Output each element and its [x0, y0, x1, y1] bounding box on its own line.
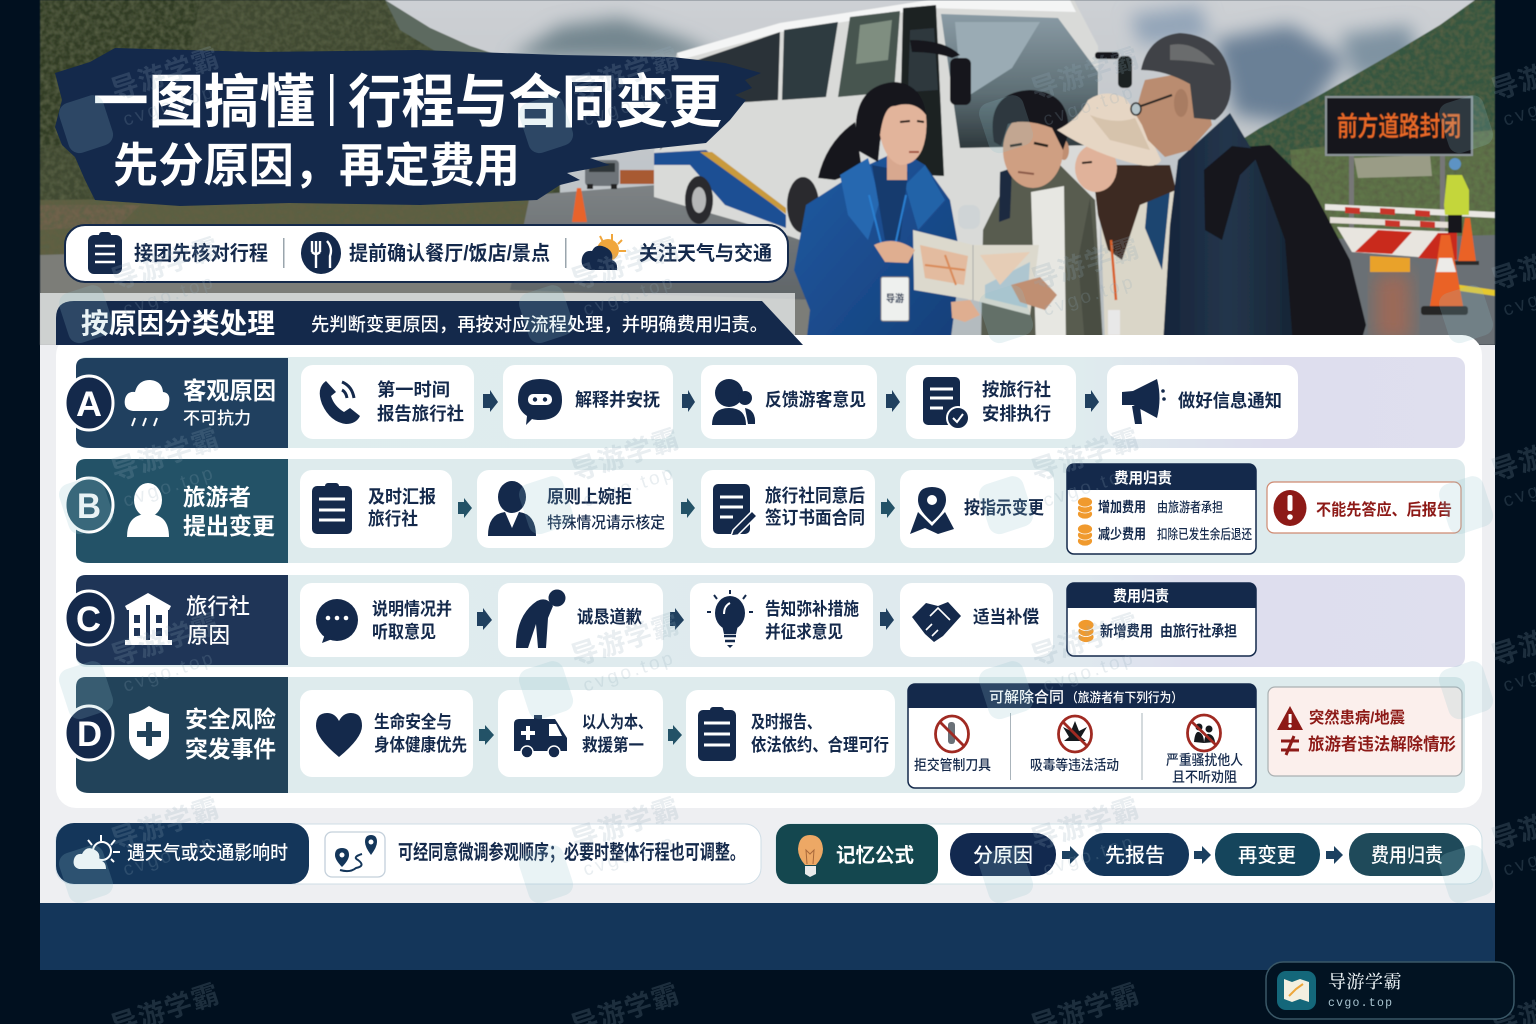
- arrow: [479, 725, 494, 745]
- step: explain and listen: [300, 583, 469, 657]
- icon: no harassment: [1188, 715, 1220, 751]
- bottom note: weather or traffic: 遇天气或交通影响时: [127, 842, 288, 864]
- diagonal watermarks: cvgo.top: [581, 462, 678, 512]
- label B: B: [77, 487, 101, 526]
- bottom note: weather or traffic: [56, 823, 761, 884]
- step: sign written contract: 旅行社同意后: [765, 485, 865, 506]
- step: decline in principle: [477, 470, 673, 548]
- cost responsibility box: [1067, 464, 1256, 554]
- cost responsibility box: 扣除已发生余后退还: [1157, 526, 1252, 542]
- label D: D: [77, 715, 102, 754]
- diagonal watermarks: 导游学霸: [1028, 793, 1143, 856]
- diagonal watermarks: 导游学霸: [108, 609, 223, 672]
- diagonal watermarks: 导游学霸: [568, 233, 683, 296]
- label A: 不可抗力: [183, 409, 251, 428]
- traffic barrier: [1325, 204, 1495, 272]
- step: explain and listen: 说明情况并: [372, 599, 452, 619]
- warning: don't agree first: 不能先答应、后报告: [1316, 500, 1452, 519]
- road worker in hi-vis vest: [1444, 158, 1469, 233]
- diagonal watermarks: cvgo.top: [121, 831, 218, 881]
- step pill: report: 先报告: [1105, 844, 1165, 867]
- diagonal watermarks: 导游学霸: [1028, 424, 1143, 487]
- cost responsibility box: 减少费用: [1098, 526, 1146, 542]
- step pill: change: 再变更: [1238, 844, 1296, 867]
- step: life first: [300, 690, 473, 777]
- diagonal watermarks: cvgo.top: [1041, 831, 1138, 881]
- step: life first: 生命安全与: [374, 712, 452, 732]
- step: notify: 做好信息通知: [1178, 390, 1282, 411]
- wet road with barrier area: [1280, 235, 1495, 345]
- diagonal watermarks: cvgo.top: [581, 831, 678, 881]
- step: change per instructions: [900, 470, 1054, 548]
- road closed LED sign: [1326, 97, 1472, 235]
- cost responsibility box: 由旅游者承担: [1157, 500, 1223, 515]
- folded map: [874, 230, 1057, 322]
- row C: agency causes: [65, 575, 1465, 667]
- tourist: young man: [981, 90, 1103, 345]
- tip: check itinerary: 接团先核对行程: [134, 241, 268, 265]
- label C: C: [76, 600, 101, 639]
- diagonal watermarks: 导游学霸: [1028, 233, 1143, 296]
- contract termination box: 吸毒等违法活动: [1030, 757, 1119, 773]
- step: report to agency: 第一时间: [377, 379, 450, 400]
- arrow: [1085, 390, 1099, 412]
- step pill: causes: [950, 833, 1056, 876]
- diagonal watermarks: cvgo.top: [1041, 81, 1138, 131]
- step: remedial measures: 告知弥补措施: [765, 599, 859, 619]
- arrow: [1326, 846, 1343, 864]
- arrow: [1194, 846, 1211, 864]
- diagonal watermarks: cvgo.top: [581, 647, 678, 697]
- brush stroke background: [55, 48, 761, 206]
- diagonal watermarks: cvgo.top: [121, 271, 218, 321]
- step: decline in principle: 原则上婉拒: [547, 486, 632, 507]
- arrow: [477, 608, 492, 630]
- step: compensate: 适当补偿: [973, 607, 1039, 627]
- step: explain and reassure: 解释并安抚: [575, 389, 660, 410]
- main white panel: [56, 335, 1482, 808]
- step: compensate: [900, 583, 1053, 657]
- icon: sun and cloud: [582, 234, 626, 270]
- diagonal watermarks: cvgo.top: [581, 271, 678, 321]
- bottom note: weather or traffic: 可经同意微调参观顺序；必要时整体行程也可调整。: [398, 840, 745, 864]
- step: life first: 身体健康优先: [374, 735, 467, 755]
- icon: route map: [325, 832, 385, 877]
- warning: illness or earthquake not a violation: 突然患病/地震: [1309, 708, 1405, 727]
- diagonal watermarks: 导游学霸: [1028, 609, 1143, 672]
- step: sincere apology: [498, 583, 663, 657]
- step: sign written contract: 签订书面合同: [765, 507, 865, 528]
- tips bar: [65, 225, 788, 282]
- icon: no weapons: [936, 716, 968, 752]
- diagonal watermarks: 导游学霸: [568, 424, 683, 487]
- step: follow agency: 安排执行: [982, 404, 1051, 424]
- icon: no drugs: [1058, 716, 1092, 752]
- label C: 原因: [187, 623, 230, 648]
- older man's backpack: [1204, 145, 1366, 345]
- contract termination box: 且不听劝阻: [1172, 769, 1237, 785]
- brand badge: 导游学霸: [1328, 968, 1402, 994]
- diagonal watermarks: 导游学霸: [108, 424, 223, 487]
- traffic cones: [1421, 218, 1479, 315]
- step: remedial measures: 并征求意见: [765, 622, 843, 642]
- step: report and act lawfully: [686, 690, 895, 777]
- step: report and act lawfully: 及时报告、: [751, 712, 821, 732]
- diagonal watermarks: 导游学霸: [568, 609, 683, 672]
- cost responsibility box: 费用归责: [1113, 587, 1169, 605]
- tip: watch weather: 关注天气与交通: [639, 241, 772, 265]
- title banner: 行程与合同变更: [348, 70, 722, 135]
- arrow: [458, 498, 472, 518]
- tour guide with lanyard and badge: 导游: [886, 292, 904, 305]
- cost responsibility box: 由旅行社承担: [1160, 622, 1237, 640]
- arrow: [681, 498, 695, 518]
- coach bus: [654, 0, 1132, 300]
- diagonal watermarks: cvgo.top: [581, 81, 678, 131]
- step: report to agency: [301, 365, 474, 439]
- tour guide with lanyard and badge: [794, 82, 961, 345]
- diagonal watermarks: 导游学霸: [568, 43, 683, 106]
- label D: [65, 677, 288, 793]
- warning: illness or earthquake not a violation: [1268, 687, 1462, 776]
- title banner: [55, 48, 761, 206]
- arrow: [682, 390, 695, 412]
- label B: [65, 459, 288, 563]
- step: sign written contract: [701, 470, 875, 548]
- contract termination box: 拒交管制刀具: [914, 757, 991, 773]
- light wash behind section: [40, 293, 795, 345]
- step pill: change: [1215, 833, 1320, 876]
- label D: 突发事件: [185, 736, 276, 762]
- row B: tourist requested change: [65, 459, 1465, 563]
- diagonal watermarks: cvgo.top: [1041, 462, 1138, 512]
- step: explain and listen: 听取意见: [372, 622, 436, 642]
- label D: 安全风险: [185, 706, 276, 732]
- diagonal watermarks: 导游学霸: [108, 43, 223, 106]
- icon: brand map: [1277, 971, 1316, 1010]
- label A: 客观原因: [183, 377, 276, 405]
- row A: objective causes: [65, 357, 1465, 448]
- label A: A: [76, 385, 102, 424]
- tourist: older man with glasses: [1131, 33, 1293, 345]
- diagonal watermarks: cvgo.top: [121, 81, 218, 131]
- contract termination box: （旅游者有下列行为）: [1066, 690, 1183, 705]
- diagonal watermarks: cvgo.top: [1041, 647, 1138, 697]
- arrow: [881, 498, 895, 518]
- step pill: report: [1083, 833, 1189, 876]
- step: report and act lawfully: 依法依约、合理可行: [751, 735, 889, 755]
- icon: fork and knife: [301, 232, 341, 274]
- hero photo: tour guide and tourists at closed mountain road: [40, 0, 1495, 345]
- diagonal watermarks: 导游学霸: [568, 793, 683, 856]
- step: report to agency: 报告旅行社: [377, 403, 464, 424]
- diagonal watermarks: cvgo.top: [1041, 271, 1138, 321]
- distant car: [585, 160, 654, 189]
- section heading: 按原因分类处理: [81, 308, 275, 339]
- label C: [65, 575, 288, 665]
- arrow: [670, 608, 684, 630]
- diagonal watermarks: cvgo.top: [121, 462, 218, 512]
- step: people-first rescue: [498, 690, 663, 777]
- label B: 旅游者: [183, 484, 251, 510]
- step pill: cost responsibility: [1349, 833, 1465, 876]
- contract termination box: 严重骚扰他人: [1166, 752, 1243, 768]
- diagonal watermarks: 导游学霸: [1028, 43, 1143, 106]
- label B: 提出变更: [183, 513, 275, 539]
- tip: confirm venues: 提前确认餐厅/饭店/景点: [349, 242, 550, 265]
- tourist: woman in bucket hat: [1057, 93, 1178, 345]
- arrow: [668, 725, 682, 745]
- step pill: cost responsibility: 费用归责: [1371, 844, 1443, 867]
- cost responsibility box: 增加费用: [1098, 499, 1146, 515]
- warning: don't agree first: [1267, 482, 1461, 533]
- step: notify: [1107, 365, 1298, 439]
- step: report promptly: 及时汇报: [368, 487, 436, 507]
- row D: safety risk and emergencies: [65, 677, 1465, 793]
- cost responsibility box: [1067, 583, 1256, 656]
- step: change per instructions: 按指示变更: [964, 497, 1044, 518]
- step: feedback: 反馈游客意见: [765, 389, 866, 410]
- step: explain and reassure: [503, 365, 673, 439]
- contract termination box: 可解除合同: [989, 688, 1064, 706]
- step: report promptly: [300, 470, 452, 548]
- lower body background: [40, 345, 1495, 903]
- road cone: [572, 188, 587, 222]
- step: follow agency: 按旅行社: [982, 379, 1051, 400]
- brand badge: [1266, 962, 1514, 1019]
- step: report promptly: 旅行社: [368, 508, 418, 529]
- section header: [56, 301, 803, 345]
- icon: light bulb: [798, 835, 823, 877]
- title line one: 一图搞懂: [93, 70, 315, 135]
- diagonal watermarks: 导游学霸: [108, 233, 223, 296]
- arrow: [880, 608, 894, 630]
- arrow: [886, 390, 900, 412]
- contract termination box: [908, 684, 1256, 788]
- bottom navy band: [40, 903, 1495, 970]
- icon: clipboard: [88, 232, 122, 274]
- title line two: 先分原因，再定费用: [113, 139, 520, 192]
- step: follow agency: [906, 365, 1076, 439]
- section subtitle: 先判断变更原因，再按对应流程处理，并明确费用归责。: [311, 314, 768, 335]
- step pill: causes: 分原因: [973, 844, 1033, 867]
- brand badge: cvgo.top: [1328, 997, 1392, 1010]
- step: people-first rescue: 救援第一: [582, 735, 644, 755]
- step: decline in principle: 特殊情况请示核定: [547, 513, 665, 532]
- arrow: [1062, 846, 1079, 864]
- step: remedial measures: [690, 583, 873, 657]
- step: sincere apology: 诚恳道歉: [577, 607, 642, 627]
- warning: illness or earthquake not a violation: 旅游者违法解除情形: [1308, 734, 1456, 754]
- road closed LED sign: 前方道路封闭: [1337, 112, 1461, 142]
- step: people-first rescue: 以人为本、: [582, 713, 652, 732]
- diagonal watermarks: cvgo.top: [121, 647, 218, 697]
- step: feedback: [701, 365, 877, 439]
- icon: sun cloud white: [74, 835, 120, 869]
- arrow: [483, 390, 498, 412]
- diagonal watermarks: 导游学霸: [108, 793, 223, 856]
- label C: 旅行社: [186, 594, 250, 619]
- label A: [65, 358, 288, 448]
- cost responsibility box: 费用归责: [1114, 469, 1172, 487]
- memory formula bar: 记忆公式: [836, 844, 914, 867]
- memory formula bar: [776, 824, 1482, 884]
- cost responsibility box: 新增费用: [1100, 622, 1153, 640]
